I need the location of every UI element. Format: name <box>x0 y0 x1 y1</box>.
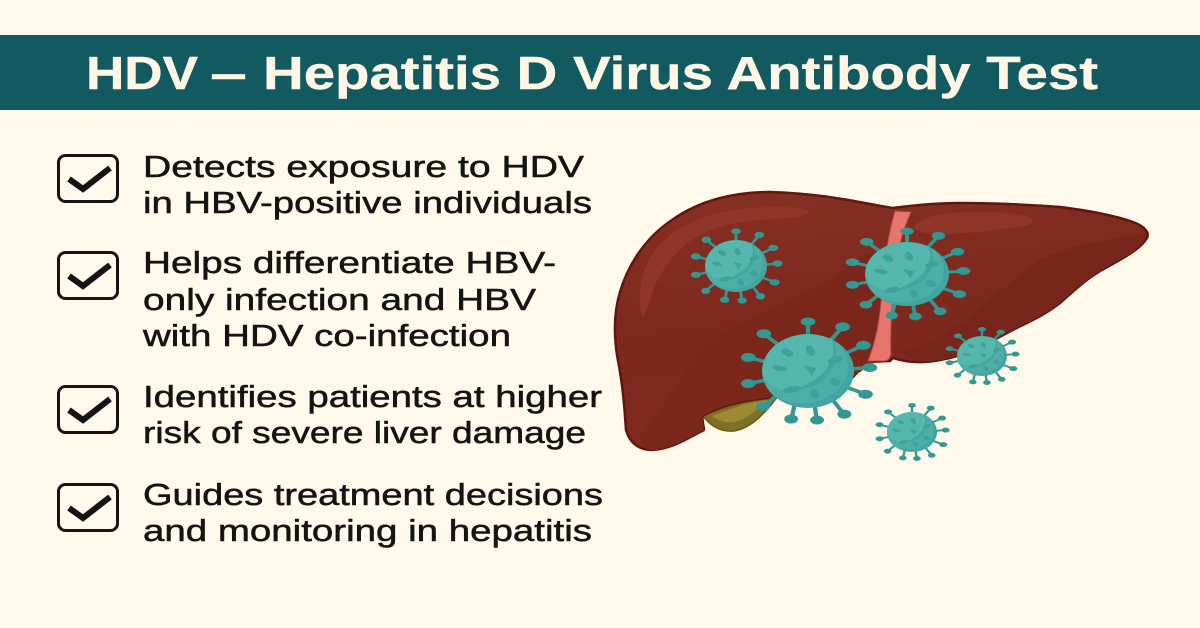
text: item 1: Detects exposure to HDV <box>143 150 585 184</box>
liver highlight: left lobe <box>640 207 810 318</box>
text: item 2 <box>142 246 556 353</box>
gallbladder <box>702 396 778 431</box>
liver highlight: right lobe <box>913 212 1032 234</box>
text: item 3 <box>143 380 602 450</box>
icon: checkbox 2 <box>58 252 118 298</box>
text: item 4: Guides treatment decisions <box>143 478 603 512</box>
text: item 1 <box>143 150 592 220</box>
item 2: differentiation <box>58 246 556 353</box>
title: HDV <box>86 47 198 99</box>
title: Hepatitis D Virus Antibody Test <box>263 47 1098 99</box>
text: item 1: in HBV-positive individuals <box>143 186 592 220</box>
liver shading: lower tones <box>640 250 885 450</box>
icon: checkbox 3 <box>58 386 118 432</box>
liver illustration <box>615 192 1148 450</box>
text: item 3: Identifies patients at higher <box>143 380 602 414</box>
title banner <box>0 35 1200 110</box>
item 4: treatment guidance <box>58 478 603 548</box>
item 1: exposure detection <box>58 150 592 220</box>
title <box>86 47 1098 99</box>
falciform ligament <box>868 211 911 361</box>
text: item 2: with HDV co-infection <box>142 319 511 353</box>
icon: checkbox 4 <box>58 484 118 530</box>
virus 1 <box>691 228 783 304</box>
virus 2 <box>846 228 970 320</box>
icon: checkbox 1 <box>58 156 118 202</box>
liver body <box>615 192 1148 450</box>
liver shading: right lobe <box>900 232 1146 361</box>
item 3: risk identification <box>58 380 602 450</box>
text: item 4: and monitoring in hepatitis <box>143 514 592 548</box>
title: — <box>212 47 245 99</box>
virus 4 <box>946 327 1020 385</box>
virus 3 <box>741 317 877 425</box>
virus 5 <box>876 403 950 461</box>
text: item 2: Helps differentiate HBV- <box>143 246 556 280</box>
text: item 2: only infection and HBV <box>143 283 537 317</box>
text: item 4 <box>143 478 603 548</box>
checklist panel <box>58 150 603 548</box>
text: item 3: risk of severe liver damage <box>143 416 586 450</box>
